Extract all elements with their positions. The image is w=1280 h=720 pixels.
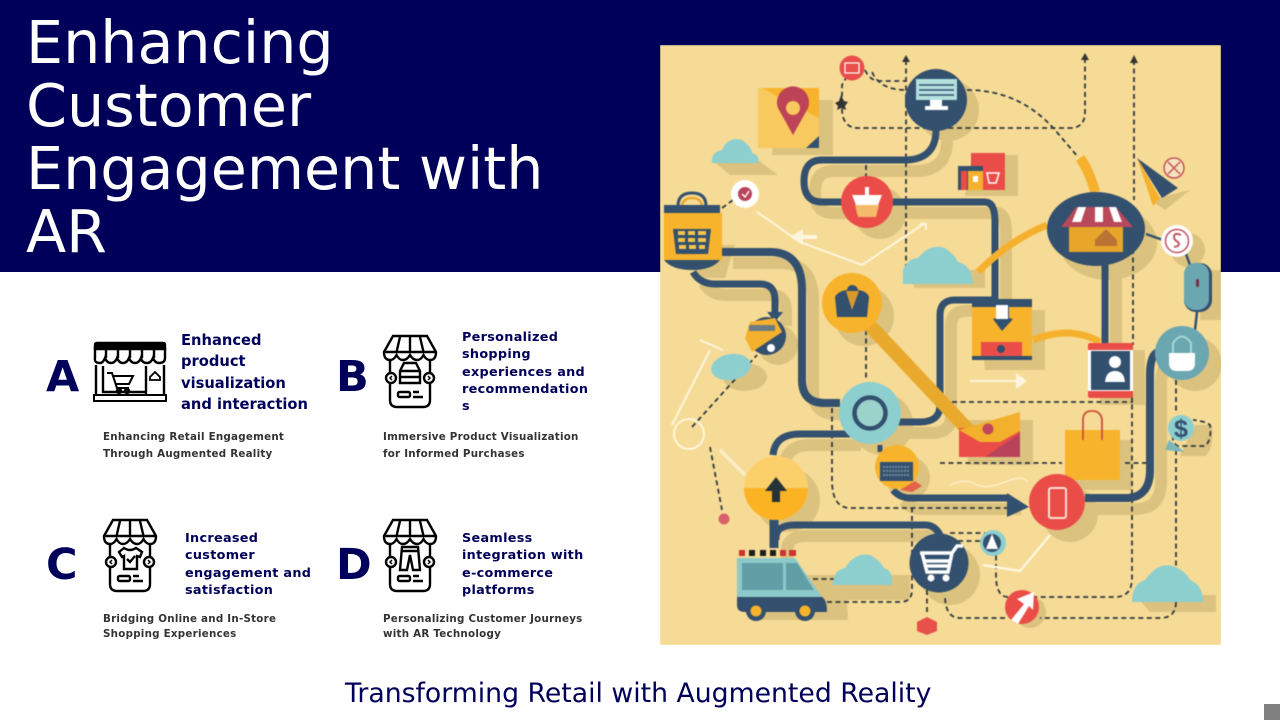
heading: Personalized [462, 330, 558, 345]
shadows [680, 79, 1222, 628]
heading [185, 531, 311, 598]
dollar badge [1165, 415, 1194, 452]
heading: customer [185, 548, 255, 563]
letter B: B [336, 352, 369, 402]
illustration: retail customer journey map [660, 45, 1221, 645]
description: Immersive Product Visualization [383, 431, 579, 443]
heading: platforms [462, 583, 535, 598]
heading: shopping [462, 347, 531, 362]
description: Shopping Experiences [103, 628, 237, 640]
description: Through Augmented Reality [103, 448, 273, 460]
stamp [1164, 158, 1184, 178]
icon: mobile shop with trousers [382, 518, 438, 592]
tablet profile [1088, 343, 1133, 398]
red stack [917, 617, 937, 635]
video badge [840, 56, 864, 80]
ring node [839, 382, 901, 444]
browser node [972, 299, 1032, 360]
red arrow badge [1005, 590, 1039, 624]
heading: Enhanced [181, 332, 262, 349]
location pin note [758, 86, 819, 148]
heading [462, 531, 584, 598]
description: Enhancing Retail Engagement [103, 431, 284, 443]
heading: recommendation [462, 382, 588, 397]
corner marker [1264, 704, 1280, 720]
shop node [1047, 192, 1145, 266]
up arrow node [744, 456, 808, 520]
description: for Informed Purchases [383, 448, 525, 460]
heading: Increased [185, 531, 258, 546]
paper plane [1137, 158, 1178, 206]
heading: integration with [462, 548, 584, 563]
heading: s [462, 399, 470, 414]
heading: engagement and [185, 566, 311, 581]
letter A: A [46, 352, 79, 402]
heading: satisfaction [185, 583, 273, 598]
heading [181, 332, 308, 413]
cart node [910, 534, 968, 592]
balloon [710, 353, 752, 381]
title: Engagement with [26, 135, 544, 203]
heading [462, 330, 588, 414]
heading: product [181, 353, 246, 370]
keyboard node [875, 445, 922, 492]
arrow heads [790, 229, 1027, 389]
basket node [841, 176, 893, 228]
heading: experiences and [462, 365, 585, 380]
compass badge [980, 530, 1006, 556]
description [103, 431, 284, 460]
panel: B [336, 330, 588, 460]
heading: e-commerce [462, 566, 553, 581]
camera node [745, 317, 786, 355]
title: AR [26, 198, 107, 266]
arrow down [767, 312, 783, 322]
heading: and interaction [181, 396, 308, 413]
lock node [1155, 326, 1209, 380]
icon: mobile shop with shirt [102, 518, 158, 592]
white routes [672, 212, 1050, 571]
description: Bridging Online and In-Store [103, 613, 276, 625]
title: Customer [26, 72, 311, 140]
description [103, 613, 276, 640]
letter D: D [336, 540, 372, 590]
check badge [731, 180, 759, 208]
road network [693, 130, 1197, 548]
dollar badge: $ [1174, 415, 1188, 443]
icon: mobile shop with bag [382, 334, 438, 408]
shopping bag left [664, 193, 722, 270]
monitor node [905, 69, 967, 131]
letter C: C [46, 540, 78, 590]
footer caption: Transforming Retail with Augmented Reality [345, 678, 931, 709]
person node [822, 273, 882, 333]
dashed routes [692, 58, 1210, 618]
shopping windows [958, 153, 1005, 190]
panel: A [46, 332, 308, 460]
heading: visualization [181, 375, 286, 392]
pointer arrow [1007, 493, 1029, 517]
icon: storefront with cart [93, 342, 167, 402]
heading: Seamless [462, 531, 533, 546]
clouds [712, 139, 1203, 602]
coin [1161, 225, 1193, 257]
header band [0, 0, 1280, 272]
description: Personalizing Customer Journeys [383, 613, 583, 625]
envelope [959, 412, 1020, 457]
title [26, 9, 544, 266]
map dot [718, 514, 730, 524]
yellow bag [1065, 411, 1120, 480]
orange connectors [860, 158, 1100, 432]
description [383, 431, 579, 460]
description: with AR Technology [383, 628, 501, 640]
description [383, 613, 583, 640]
title: Enhancing [26, 9, 334, 77]
delivery van [737, 550, 827, 621]
phone node [1029, 474, 1085, 530]
panel: D [336, 518, 584, 640]
panel: C [46, 518, 311, 640]
mouse [1184, 263, 1212, 312]
